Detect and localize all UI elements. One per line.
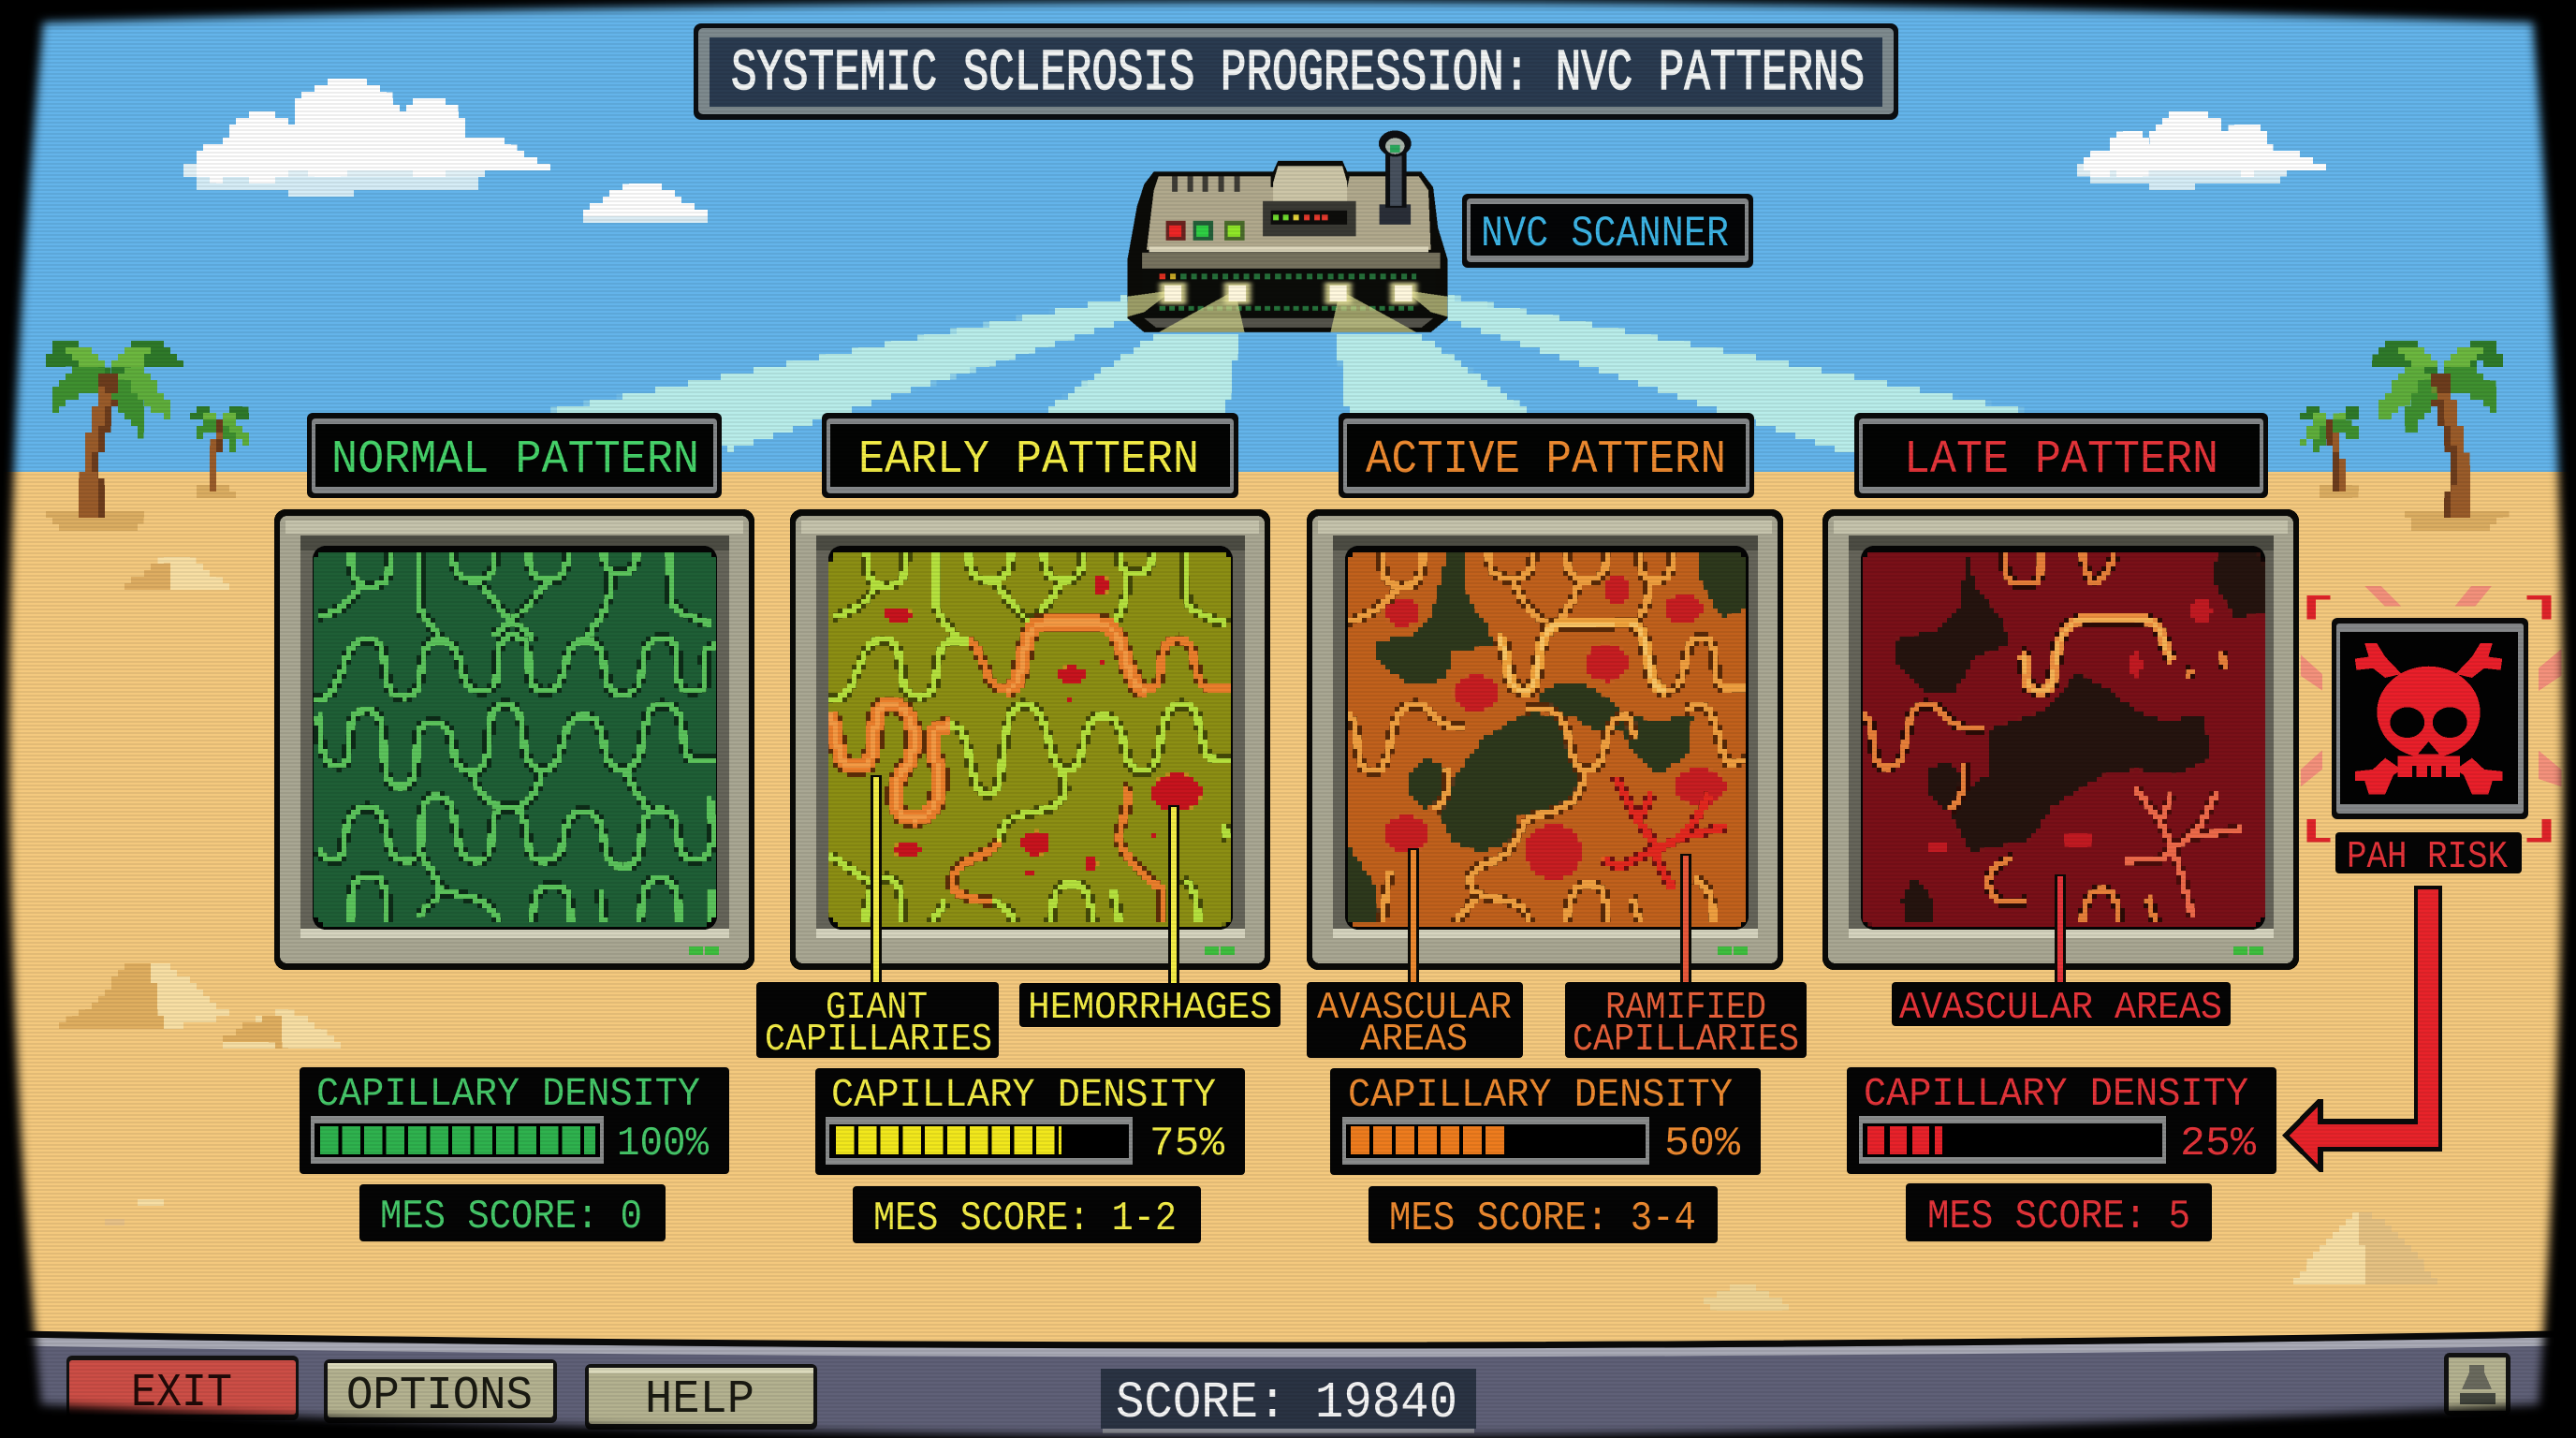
callout: avascular areas: AREAS (1360, 1019, 1468, 1062)
density panel: early 75% (815, 1068, 1245, 1175)
button: exit (66, 1356, 299, 1420)
density panel: normal 100%: CAPILLARY DENSITY (316, 1071, 700, 1117)
avascular areas (1348, 551, 1747, 924)
scanner: LED rows (1160, 273, 1416, 308)
panel: late monitor (1822, 509, 2299, 970)
callout: avascular areas: AVASCULAR (1317, 987, 1512, 1030)
button: exit: EXIT (131, 1367, 232, 1420)
hemorrhages (1383, 575, 1726, 879)
callout: hemorrhages: HEMORRHAGES (1028, 987, 1272, 1030)
density panel: late 25%: 25% (2180, 1121, 2257, 1167)
button: options: OPTIONS (346, 1370, 533, 1423)
button: help (585, 1364, 817, 1430)
density panel: active 50% (1330, 1068, 1761, 1175)
callout: giant capillaries (756, 982, 999, 1062)
score display: SCORE: 19840 (1116, 1373, 1457, 1432)
capillary loops (830, 551, 1231, 922)
scanner: beam overlay (1128, 290, 1447, 332)
capillary loops (1348, 551, 1747, 922)
heading: early pattern: EARLY PATTERN (858, 433, 1199, 487)
density panel: normal 100%: 100% (617, 1121, 710, 1167)
screen: early capillaries (830, 551, 1231, 926)
label: PAH risk: PAH RISK (2347, 836, 2508, 879)
scanner device (1128, 130, 1447, 332)
sand dunes (54, 554, 2439, 1311)
warning rays around PAH icon (2301, 586, 2561, 840)
palm tree: left small (189, 408, 255, 496)
light beams from the scanner (524, 297, 2050, 455)
screen: normal capillaries (315, 551, 715, 926)
callout: giant capillaries: GIANT (826, 987, 928, 1030)
heading: early pattern (822, 413, 1238, 498)
icon: small system button (2444, 1353, 2510, 1416)
leader line: avascular areas late (2055, 874, 2066, 983)
scanner: lamps (1160, 283, 1417, 304)
panel: active monitor (1307, 509, 1783, 970)
label: NVC scanner: NVC SCANNER (1481, 210, 1729, 258)
density panel: early 75%: CAPILLARY DENSITY (831, 1072, 1216, 1118)
score: active: MES SCORE: 3-4 (1389, 1196, 1696, 1242)
background: sky (0, 0, 2576, 472)
background: sand (0, 472, 2576, 1438)
callout: ramified capillaries: RAMIFIED (1605, 987, 1766, 1030)
cloud: right (2078, 111, 2333, 188)
leader line: giant capillaries (871, 775, 882, 983)
callout: ramified capillaries (1565, 982, 1807, 1062)
callout: giant capillaries: CAPILLARIES (765, 1019, 992, 1062)
screen: late capillaries (1863, 551, 2266, 926)
heading: late pattern (1854, 413, 2268, 498)
title banner (694, 23, 1898, 120)
heading: active pattern: ACTIVE PATTERN (1366, 433, 1726, 487)
leader line: hemorrhages (1168, 805, 1179, 983)
cloud: small (583, 183, 710, 225)
score: late: MES SCORE: 5 (1927, 1194, 2190, 1240)
density panel: active 50%: CAPILLARY DENSITY (1348, 1072, 1733, 1118)
heading: normal pattern (307, 413, 722, 498)
score: normal: MES SCORE: 0 (380, 1194, 642, 1240)
panel: early monitor (790, 509, 1270, 970)
heading: normal pattern: NORMAL PATTERN (331, 433, 699, 487)
avascular areas (1894, 551, 2266, 922)
callout: avascular areas (1307, 982, 1523, 1062)
density panel: active 50%: 50% (1664, 1121, 1741, 1167)
panel: normal monitor (274, 509, 754, 970)
scanner: buttons (1165, 221, 1245, 241)
palm tree: right small (2297, 408, 2363, 496)
hemorrhages (1929, 599, 2212, 853)
density panel: late 25%: CAPILLARY DENSITY (1864, 1071, 2248, 1117)
bottom control bar (19, 1334, 2555, 1438)
leader line: ramified capillaries (1680, 854, 1691, 983)
scanner: top module and display (1263, 166, 1355, 236)
heading: active pattern (1339, 413, 1754, 498)
callout: ramified capillaries: CAPILLARIES (1573, 1019, 1799, 1062)
label: NVC scanner (1462, 194, 1753, 268)
palm tree: left large (42, 341, 182, 528)
cloud: large left (183, 80, 558, 199)
icon: PAH risk skull (2332, 618, 2528, 819)
score: early: MES SCORE: 1-2 (873, 1196, 1177, 1242)
title text: SYSTEMIC SCLEROSIS PROGRESSION: NVC PATTERNS (731, 40, 1865, 107)
arrow: PAH risk to late density (2282, 886, 2442, 1172)
capillary loops (1863, 551, 2242, 922)
screen: active capillaries (1347, 551, 1747, 926)
heading: late pattern: LATE PATTERN (1904, 433, 2218, 487)
scanner: joystick (1379, 130, 1412, 225)
button: help: HELP (645, 1373, 754, 1427)
hemorrhages (884, 576, 1202, 874)
density panel: early 75%: 75% (1149, 1121, 1225, 1167)
callout: avascular areas late: AVASCULAR AREAS (1899, 987, 2222, 1030)
palm tree: right large (2368, 341, 2508, 528)
density panel: late 25% (1847, 1067, 2276, 1174)
leader line: avascular areas active (1408, 848, 1419, 983)
density panel: normal 100% (300, 1067, 729, 1174)
